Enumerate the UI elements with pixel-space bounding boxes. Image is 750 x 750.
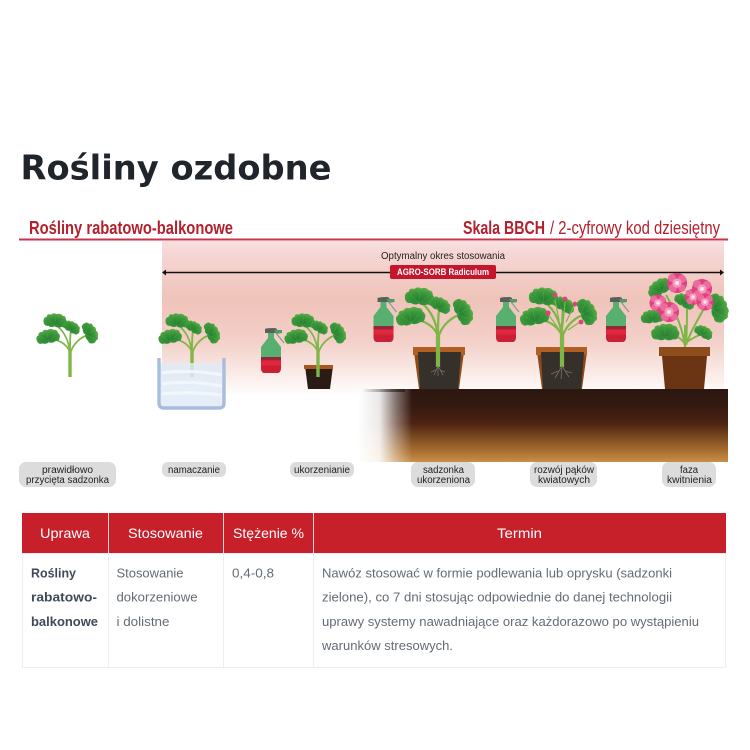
table [22,513,726,668]
table header: Termin [497,525,542,541]
cell: crop: Rośliny [31,566,77,580]
label: rooting: ukorzenianie [294,465,350,476]
cell: timing: zielone), co 7 dni stosując odpowiednie do danej technologii [322,590,672,604]
label: bud development [530,462,597,487]
cell: crop [31,566,98,629]
sprayer 4 [606,297,629,342]
table header: Stosowanie [128,525,203,541]
label: product name: AGRO-SORB Radiculum [397,267,489,277]
table header [22,513,726,553]
stage 4: rooted cutting [394,286,477,389]
stage 6: flowering [640,273,731,389]
label: rooted cutting [411,462,475,487]
chart: growth stages [19,218,731,487]
label: trimmed cutting: przycięta sadzonka [26,475,109,486]
label: flowering [662,462,716,487]
cell: concentration: 0,4-0,8 [232,566,274,580]
title: Rośliny ozdobne [20,148,332,188]
sprayer 3 [496,297,519,342]
cell: timing: Nawóz stosować w formie podlewania lub oprysku (sadzonki [322,566,672,580]
label: flowering: kwitnienia [667,475,712,486]
table body frame [22,553,726,668]
cell: crop: rabatowo- [31,590,97,604]
label: product name [390,265,496,279]
arrow: optimal period [162,270,724,276]
soil band [358,389,728,462]
heading: BBCH scale: / 2-cyfrowy kod dziesiętny [550,218,720,238]
table header: Stężenie % [233,525,304,541]
cell: crop: balkonowe [31,614,98,629]
sprayer 2 [374,297,396,342]
label: optimal period: Optymalny okres stosowania [381,251,505,262]
stage 1: trimmed cutting [35,312,101,377]
cell: timing: warunków stresowych. [321,638,453,653]
stage 5: flower bud development [518,286,601,389]
heading: BBCH scale: Skala BBCH [463,218,545,238]
label: soaking [162,462,226,477]
cell: application: dokorzeniowe [116,590,198,604]
label: rooted cutting: sadzonka [423,465,464,476]
label: soaking: namaczanie [168,465,220,476]
stage 3: rooting in small pot [283,312,349,389]
heading: crop group: Rośliny rabatowo-balkonowe [29,218,233,238]
label: rooting [290,462,354,477]
stage 2: soaking in water [157,312,224,408]
sprayer 1 [261,328,284,373]
label: bud development: rozwój pąków [534,465,595,476]
cell: timing [321,566,699,653]
heading: BBCH scale [463,218,720,238]
cell: timing: uprawy systemy nawadniające oraz każdorazowo po wystąpieniu [322,614,699,629]
label: rooted cutting: ukorzeniona [417,475,470,486]
panel: pink optimal period background [162,241,724,396]
cell: application: Stosowanie [116,566,184,580]
cell: application [116,566,198,629]
cell: application: i dolistne [116,614,170,629]
label: bud development: kwiatowych [538,475,590,486]
label: trimmed cutting: prawidłowo [42,465,93,476]
label: flowering: faza [680,465,698,476]
label: trimmed cutting [19,462,116,487]
table header: Uprawa [40,525,90,541]
